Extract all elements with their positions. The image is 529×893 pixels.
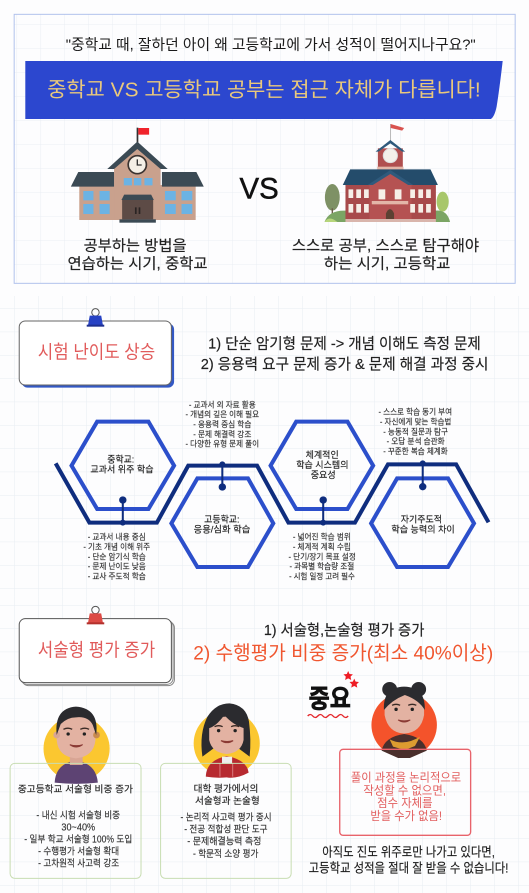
hexagon label: high school bbox=[194, 514, 250, 534]
hexagon label: middle school: 중학교: bbox=[107, 455, 134, 465]
list: middle school study bbox=[83, 532, 150, 581]
hexagon diagram bbox=[56, 422, 489, 567]
list: study system: - 시험 일정 고려 필수 bbox=[289, 571, 355, 581]
hexagon label: study system: 학습 시스템의 bbox=[296, 459, 349, 470]
card: secondary school essay share: 30~40% bbox=[61, 822, 95, 833]
avatar: boy bbox=[44, 707, 110, 784]
closing message bbox=[309, 845, 508, 875]
list: high school study: - 응용력 중심 학습 bbox=[193, 419, 251, 429]
key points: 2) 응용력 요구 문제 증가 & 문제 해결 과정 중시 bbox=[201, 356, 489, 373]
list: self-directed: - 능동적 질문과 탐구 bbox=[383, 426, 448, 436]
panel: essay assessment bbox=[10, 606, 508, 878]
key point 1: 1) 서술형,논술형 평가 증가 bbox=[264, 622, 425, 639]
key points bbox=[201, 335, 489, 373]
vs label: VS bbox=[240, 172, 279, 205]
list: self-directed: - 자신에게 맞는 학습법 bbox=[380, 417, 451, 427]
list: study system: - 단기/장기 목표 설정 bbox=[288, 551, 356, 561]
card: secondary school essay share: - 수행평가 서술형 확대 bbox=[38, 844, 119, 857]
hexagon label: high school: 응용/심화 학습 bbox=[194, 524, 250, 534]
list: middle school study: - 문제 난이도 낮음 bbox=[88, 561, 146, 571]
card: university essay assessment bbox=[161, 763, 291, 878]
list: study system: - 넓어진 학습 범위 bbox=[293, 532, 351, 542]
card: university essay assessment: - 문제해결능력 측정 bbox=[187, 835, 261, 848]
list: middle school study: - 단순 암기식 학습 bbox=[88, 551, 146, 561]
callout: logical writing bbox=[340, 749, 471, 835]
list: study system bbox=[288, 532, 356, 581]
icon: important stamp bbox=[308, 671, 359, 718]
icon: middle school building bbox=[71, 128, 204, 223]
caption: middle school bbox=[67, 238, 208, 272]
hexagon label: study system: 중요성 bbox=[311, 470, 336, 480]
title card: essay assessment: 서술형 평가 증가 bbox=[38, 640, 155, 661]
key point 2: 2) 수행평가 비중 증가(최소 40%이상) bbox=[193, 642, 493, 664]
caption: high school: 하는 시기, 고등학교 bbox=[324, 255, 451, 272]
list: high school study bbox=[186, 399, 259, 449]
card: university essay assessment: 대학 평가에서의 bbox=[194, 783, 258, 795]
panel: middle school vs high school bbox=[14, 14, 515, 283]
title card: exam difficulty bbox=[19, 309, 174, 388]
list: self-directed bbox=[379, 407, 452, 456]
callout: logical writing: 작성할 수 없으면, bbox=[363, 783, 446, 797]
card: university essay assessment: - 전공 적합성 판단 도구 bbox=[184, 824, 268, 836]
card: secondary school essay share: 중고등학교 서술형 비중 증가 bbox=[18, 784, 133, 796]
callout: logical writing: 받을 수가 없음! bbox=[370, 809, 442, 823]
hexagon label: study system: 체계적인 bbox=[306, 449, 339, 460]
icon: important stamp: 중요 bbox=[309, 685, 351, 713]
caption: middle school: 공부하는 방법을 bbox=[84, 238, 187, 255]
list: middle school study: - 기초 개념 이해 위주 bbox=[83, 542, 150, 552]
hexagon label: self-directed bbox=[391, 513, 455, 534]
list: high school study: - 다양한 유형 문제 풀이 bbox=[186, 439, 259, 449]
avatar: girl with hair buns bbox=[371, 682, 437, 758]
card: secondary school essay share: - 고차원적 사고력 강조 bbox=[38, 858, 119, 870]
hexagon label: middle school: 교과서 위주 학습 bbox=[90, 465, 154, 475]
card: secondary school essay share: - 일부 학교 서술형 100% 도입 bbox=[24, 832, 132, 845]
hexagon label: high school: 고등학교: bbox=[204, 514, 240, 524]
callout: logical writing: 점수 자체를 bbox=[377, 796, 433, 810]
quote heading: "중학교 때, 잘하던 아이 왜 고등학교에 가서 성적이 떨어지나구요?" bbox=[66, 36, 476, 53]
list: study system: - 과목별 학습량 조절 bbox=[289, 561, 354, 571]
hexagon label: self-directed: 자기주도적 bbox=[401, 513, 442, 524]
title card: essay assessment bbox=[19, 606, 174, 686]
list: study system: - 체계적 계획 수립 bbox=[293, 542, 351, 552]
list: self-directed: - 꾸준한 복습 체계화 bbox=[383, 446, 448, 456]
card: secondary school essay share: - 내신 시험 서술형 비중 bbox=[36, 809, 120, 821]
closing message: 아직도 진도 위주로만 나가고 있다면, bbox=[322, 845, 495, 860]
title card: exam difficulty: 시험 난이도 상승 bbox=[38, 341, 155, 362]
list: self-directed: - 오답 분석 습관화 bbox=[387, 436, 445, 446]
icon: high school building bbox=[325, 124, 450, 222]
panel: exam difficulty bbox=[19, 309, 489, 581]
list: high school study: - 교과서 외 자료 활용 bbox=[189, 399, 256, 409]
callout: logical writing: 풀이 과정을 논리적으로 bbox=[351, 771, 461, 785]
title banner: 중학교 VS 고등학교 공부는 접근 자체가 다릅니다! bbox=[47, 79, 481, 102]
caption: high school bbox=[292, 238, 479, 272]
key points: 1) 단순 암기형 문제 -> 개념 이해도 측정 문제 bbox=[208, 335, 481, 352]
card: university essay assessment: - 학문적 소양 평가 bbox=[193, 848, 258, 860]
card: university essay assessment: - 논리적 사고력 평가 중시 bbox=[180, 812, 272, 824]
card: university essay assessment: 서술형과 논술형 bbox=[195, 795, 260, 807]
list: high school study: - 개념의 깊은 이해 필요 bbox=[186, 409, 259, 419]
hexagon label: middle school bbox=[90, 455, 154, 475]
avatar: girl with red jacket bbox=[194, 703, 260, 778]
card: secondary school essay share bbox=[10, 763, 141, 878]
list: middle school study: - 교과서 내용 중심 bbox=[88, 532, 146, 542]
caption: middle school: 연습하는 시기, 중학교 bbox=[67, 255, 208, 272]
hexagon label: study system bbox=[296, 449, 349, 480]
list: self-directed: - 스스로 학습 동기 부여 bbox=[379, 407, 452, 417]
hexagon label: self-directed: 학습 능력의 차이 bbox=[391, 523, 455, 534]
list: high school study: - 문제 해결력 강조 bbox=[193, 429, 251, 439]
caption: high school: 스스로 공부, 스스로 탐구해야 bbox=[292, 238, 479, 255]
title banner bbox=[25, 61, 503, 119]
list: middle school study: - 교사 주도적 학습 bbox=[88, 571, 146, 581]
